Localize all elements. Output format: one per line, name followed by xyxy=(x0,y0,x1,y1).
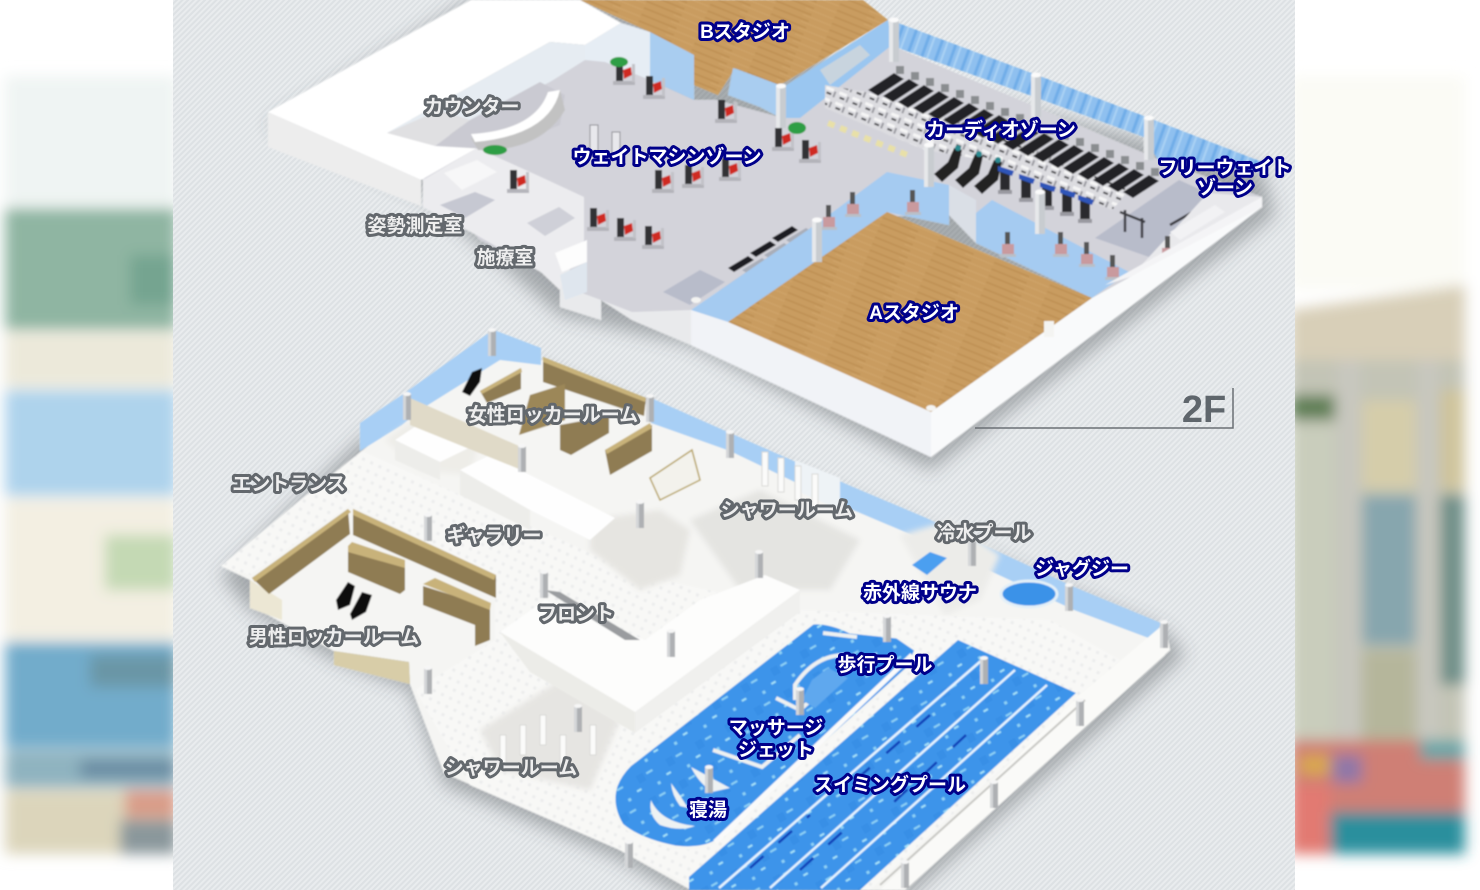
2F outer wall left block xyxy=(268,112,931,457)
label: フリーウェイトゾーン: ゾーン xyxy=(1197,177,1253,199)
free weight equipment xyxy=(1120,205,1205,238)
glass back wall xyxy=(890,20,1262,172)
walking pool islands xyxy=(713,633,912,842)
bright room tops xyxy=(395,420,615,540)
label: シャワールーム upper: シャワールーム xyxy=(721,500,853,521)
label: ウェイトマシンゾーン: ウェイトマシンゾーン xyxy=(572,146,762,168)
floor: 1F xyxy=(221,328,1185,890)
label: マッサージジェット xyxy=(729,718,823,761)
mirror machines beside studio A xyxy=(821,190,1176,293)
studio A wood floor xyxy=(728,212,1092,412)
tiled walkways xyxy=(221,451,1120,890)
shadow under 1F xyxy=(221,350,1185,890)
glass walls around studio A xyxy=(691,172,1129,322)
studio B wood floor xyxy=(580,0,888,95)
lane ropes xyxy=(719,660,1047,888)
1F columns xyxy=(403,328,1168,888)
label: カーディオゾーン: カーディオゾーン xyxy=(926,118,1076,141)
label: 女性ロッカールーム: 女性ロッカールーム xyxy=(468,404,638,426)
panel: striped map background xyxy=(173,0,1295,890)
label: マッサージジェット: マッサージ xyxy=(729,718,823,739)
glass back walls xyxy=(360,330,1161,640)
free weight mat xyxy=(1095,180,1208,257)
treadmill row xyxy=(868,66,1159,198)
vending counter xyxy=(650,450,700,500)
label: 冷水プール: 冷水プール xyxy=(936,522,1032,544)
label: カウンター: カウンター xyxy=(424,96,520,118)
label: スイミングプール: スイミングプール xyxy=(814,773,966,796)
floor label line: 2F xyxy=(975,388,1233,431)
white equipment frames xyxy=(590,125,620,156)
shower partitions xyxy=(500,452,818,765)
studio corner caps xyxy=(691,297,1054,411)
elliptical machines xyxy=(998,166,1094,223)
rear wall by studio B xyxy=(585,23,650,80)
label: 寝湯: 寝湯 xyxy=(689,799,727,821)
weight benches xyxy=(728,226,814,275)
lockers: women xyxy=(480,357,652,475)
label: エントランス: エントランス xyxy=(232,474,346,495)
2F columns xyxy=(776,18,1154,262)
weight machines xyxy=(507,62,821,249)
yellow seats row xyxy=(828,123,910,156)
walking pool xyxy=(614,623,916,848)
bike clusters xyxy=(825,85,1130,210)
white zone near corner xyxy=(1130,193,1262,277)
shadow under 2F xyxy=(268,0,1275,470)
tan wall strips xyxy=(250,398,519,684)
room block sides xyxy=(395,440,530,530)
glass walls around studio B xyxy=(650,20,892,118)
swimming pool xyxy=(689,640,1076,890)
2F outer wall faces xyxy=(691,197,1262,457)
plants xyxy=(483,57,806,155)
label: 歩行プール: 歩行プール xyxy=(837,654,933,676)
front desk block xyxy=(500,575,800,733)
pool edge ledge xyxy=(880,623,1170,890)
1F base floor xyxy=(221,340,1165,890)
soft room blocks and partitions xyxy=(385,415,1000,790)
photo strip: blurred right building photo xyxy=(1290,76,1465,854)
counter room wall xyxy=(387,42,585,133)
2F text: 2F xyxy=(1182,389,1226,431)
photo strip: blurred left building photo xyxy=(5,76,177,854)
label: Aスタジオ: Aスタジオ xyxy=(869,302,959,324)
reception counter xyxy=(471,90,565,150)
label: フロント: フロント xyxy=(538,604,614,625)
leader line xyxy=(975,388,1233,428)
label: ジャグジー: ジャグジー xyxy=(1035,557,1129,580)
side rooms floor xyxy=(423,148,584,290)
label: シャワールーム lower: シャワールーム xyxy=(445,758,577,779)
floor: 2F xyxy=(268,0,1275,470)
label: フリーウェイトゾーン: フリーウェイト xyxy=(1158,157,1292,179)
walking pool inner xyxy=(802,668,848,708)
label: 施療室: 施療室 xyxy=(476,247,534,269)
label: Bスタジオ: Bスタジオ xyxy=(700,21,790,43)
cold pool xyxy=(912,552,947,575)
label: 姿勢測定室: 姿勢測定室 xyxy=(367,215,463,237)
recumbent machines xyxy=(934,145,1002,194)
label: フリーウェイトゾーン xyxy=(1158,157,1292,199)
massage chairs xyxy=(336,368,482,620)
label: 赤外線サウナ: 赤外線サウナ xyxy=(863,582,977,604)
label: 男性ロッカールーム: 男性ロッカールーム xyxy=(249,626,419,648)
sleeping bath shapes xyxy=(650,767,730,829)
label: ギャラリー: ギャラリー xyxy=(446,525,542,547)
main grey floor xyxy=(423,45,1262,312)
lockers: men xyxy=(252,509,496,646)
jacuzzi xyxy=(1001,581,1057,607)
label: マッサージジェット: ジェット xyxy=(738,740,814,761)
white roof block xyxy=(268,0,621,180)
